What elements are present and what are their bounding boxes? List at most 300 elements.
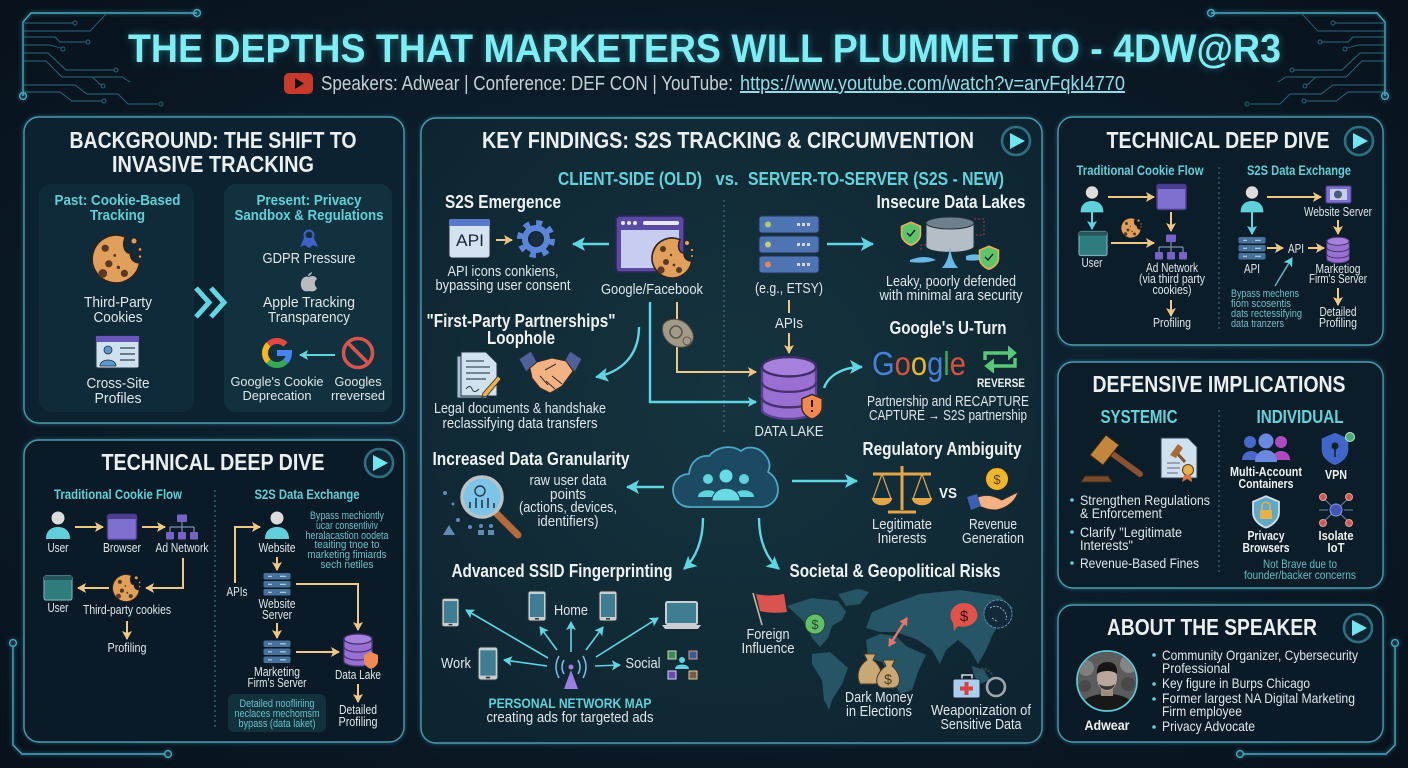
subtitle bbox=[284, 73, 1125, 95]
detailed profiling bbox=[1319, 304, 1357, 330]
icon: medical kit bbox=[953, 675, 980, 698]
icon: speech bubble bbox=[950, 603, 977, 631]
icon: handcuffs bbox=[975, 669, 1005, 696]
heading: Google's U-Turn bbox=[890, 318, 1006, 338]
device: phone (pink) bbox=[599, 591, 617, 621]
icon: api window: API bbox=[456, 231, 484, 250]
arrow bbox=[1308, 247, 1324, 249]
icon: iot hub bbox=[1319, 494, 1353, 526]
list: speaker bio: Firm employee bbox=[1162, 703, 1242, 719]
icon: user bbox=[1241, 186, 1263, 212]
icon: flag bbox=[753, 593, 787, 625]
icon: play bbox=[1344, 614, 1372, 642]
label: DATA LAKE bbox=[754, 423, 824, 440]
heading: ABOUT THE SPEAKER bbox=[1107, 614, 1317, 640]
icon: cookie bbox=[1121, 218, 1142, 238]
description: API icons conkiens, bbox=[448, 263, 558, 280]
label: weaponization: Sensitive Data bbox=[940, 716, 1022, 733]
list: systemic: & Enforcement bbox=[1080, 505, 1162, 521]
icon: browser bbox=[1157, 184, 1186, 210]
user node: User bbox=[48, 540, 69, 555]
comparison heading: CLIENT-SIDE (OLD) bbox=[558, 169, 702, 189]
heading: TECHNICAL DEEP DIVE bbox=[102, 449, 324, 475]
icon: gdpr lock bbox=[300, 230, 318, 248]
heading bbox=[426, 311, 616, 348]
website node: Website bbox=[258, 540, 296, 555]
label: (e.g., ETSY) bbox=[755, 280, 823, 297]
description: Partnership and RECAPTURE bbox=[867, 393, 1029, 410]
arrow bbox=[1267, 247, 1283, 249]
website server node: Website bbox=[258, 596, 296, 611]
data lake node: Data Lake bbox=[335, 667, 381, 682]
heading: Increased Data Granularity bbox=[432, 449, 630, 469]
label: foreign influence: Foreign bbox=[746, 626, 790, 643]
marketing firm's server node: Marketiog bbox=[1316, 261, 1360, 276]
annotation: heralacastion oodeta bbox=[306, 530, 389, 542]
arrow bbox=[1267, 196, 1321, 198]
heading: Societal & Geopolitical Risks bbox=[790, 561, 1000, 581]
description: identifiers) bbox=[538, 513, 598, 530]
subheading: s2s data exchange: S2S Data Exchange bbox=[254, 486, 360, 502]
icon: money bags: $ bbox=[884, 671, 892, 687]
diagram: traditional cookie flow bbox=[44, 512, 209, 655]
icon: scales bbox=[873, 466, 931, 512]
description: raw user data bbox=[530, 472, 607, 489]
label: weaponization bbox=[931, 702, 1032, 733]
comparison heading: vs. bbox=[716, 169, 738, 189]
section: increased data granularity bbox=[432, 449, 630, 535]
ad network node bbox=[1139, 234, 1205, 297]
arrow bbox=[296, 584, 358, 630]
icon: play bbox=[1345, 127, 1373, 155]
heading: Insecure Data Lakes bbox=[876, 192, 1026, 212]
arrow bbox=[496, 239, 512, 241]
speaker name: Adwear bbox=[1084, 717, 1130, 733]
ad network node: Ad Network bbox=[1146, 260, 1198, 275]
annotation: ucar consentiviv bbox=[316, 520, 378, 532]
arrow bbox=[146, 558, 183, 588]
label: reverse: REVERSE bbox=[977, 376, 1025, 390]
label: cross-site profiles bbox=[86, 375, 150, 407]
icon: user bbox=[1081, 186, 1103, 212]
browser node bbox=[103, 514, 142, 555]
icon: social network bbox=[668, 651, 697, 679]
icon: stone bbox=[663, 319, 693, 347]
annotation: sech netiles bbox=[320, 559, 374, 571]
icon: green coin: $ bbox=[811, 617, 819, 632]
website server node bbox=[258, 573, 296, 622]
icon: vpn shield bbox=[1322, 432, 1354, 465]
arrow bbox=[1170, 212, 1172, 231]
label: gdpr pressure: GDPR Pressure bbox=[262, 250, 356, 267]
label: weaponization: Weaponization of bbox=[931, 702, 1032, 719]
icon: youtube bbox=[284, 73, 313, 94]
profiling label: Profiling bbox=[1153, 315, 1191, 330]
arrow: curved to partnerships bbox=[596, 327, 639, 377]
annotation: Bypass mechens bbox=[1231, 288, 1299, 300]
arrow bbox=[1111, 242, 1154, 244]
description bbox=[867, 393, 1029, 424]
arrow: curved to societal bbox=[759, 518, 779, 569]
heading: background: INVASIVE TRACKING bbox=[112, 151, 314, 177]
arrow bbox=[827, 243, 873, 245]
heading: KEY FINDINGS: S2S TRACKING & CIRCUMVENTION bbox=[482, 127, 974, 153]
arrow bbox=[142, 526, 165, 528]
arrow bbox=[75, 526, 103, 528]
label: dark money in elections: Dark Money bbox=[845, 689, 913, 706]
label: apple tracking transparency bbox=[263, 294, 355, 326]
device: phone bbox=[442, 598, 459, 627]
annotation: dats rectessifying bbox=[1231, 308, 1302, 320]
user window node bbox=[44, 576, 72, 615]
arrow: annotation bbox=[1275, 258, 1292, 286]
detailed profiling: Profiling bbox=[338, 714, 378, 729]
past heading: Tracking bbox=[90, 207, 145, 224]
icon: cloud with users bbox=[673, 447, 778, 507]
label: foreign influence bbox=[742, 626, 794, 657]
arrow bbox=[573, 243, 609, 245]
icon: play bbox=[365, 449, 393, 477]
heading: "First-Party Partnerships" bbox=[426, 311, 616, 331]
description: Leaky, poorly defended bbox=[886, 273, 1016, 290]
arrow: to data lake (cyan) bbox=[650, 302, 756, 402]
description: with minimal ara security bbox=[879, 287, 1023, 304]
marketing firm's server node bbox=[1309, 237, 1368, 286]
heading: Loophole bbox=[487, 328, 555, 348]
icon: dark globe bbox=[984, 600, 1012, 628]
description: bypassing user consent bbox=[436, 277, 571, 294]
api server node: API bbox=[1244, 261, 1260, 276]
label: third-party cookies: Cookies bbox=[94, 309, 142, 326]
ad network node: cookies) bbox=[1152, 282, 1192, 297]
icon: handshake bbox=[519, 351, 582, 393]
device: work phone bbox=[478, 647, 498, 680]
panel: defensive implications bbox=[1058, 362, 1383, 588]
caption: creating ads for targeted ads bbox=[486, 709, 654, 726]
arrow: apis: APIs bbox=[775, 315, 803, 332]
list: speaker bio bbox=[1152, 647, 1358, 734]
heading: Regulatory Ambiguity bbox=[862, 439, 1022, 459]
cookie node: Third-party cookies bbox=[83, 602, 171, 617]
icon: coin and hand bbox=[967, 468, 1018, 510]
api server node bbox=[1238, 237, 1266, 276]
label: third-party cookies: Third-Party bbox=[84, 294, 152, 311]
description: CAPTURE → S2S partnership bbox=[869, 407, 1027, 424]
section: s2s emergence bbox=[436, 192, 571, 294]
label: cross-site profiles: Profiles bbox=[94, 390, 142, 407]
annotation: Bypass mechiontly bbox=[310, 510, 384, 522]
label: personal network map: PERSONAL NETWORK MAP bbox=[488, 695, 652, 711]
list: speaker bio: Key figure in Burps Chicago bbox=[1162, 675, 1310, 691]
label: revenue generation bbox=[962, 516, 1024, 547]
icon: leaky tank bbox=[902, 217, 998, 269]
subheading: traditional cookie flow: Traditional Cookie Flow bbox=[54, 486, 182, 502]
diagram: s2s data exchange bbox=[226, 510, 389, 732]
arrow bbox=[78, 587, 109, 589]
arrow bbox=[357, 684, 359, 702]
label: third-party cookies bbox=[84, 294, 152, 326]
present heading: Sandbox & Regulations bbox=[234, 207, 384, 224]
diagram: traditional cookie flow bbox=[1079, 184, 1205, 330]
item: vpn bbox=[1322, 432, 1354, 482]
user window node: User bbox=[48, 600, 69, 615]
icon: prohibited bbox=[344, 338, 372, 368]
icon: people bbox=[1242, 434, 1290, 462]
icon: certificate document bbox=[1161, 438, 1197, 482]
description: reclassifying data transfers bbox=[442, 415, 598, 432]
section: first-party partnerships loophole bbox=[426, 311, 616, 432]
present heading: Present: Privacy bbox=[256, 192, 362, 209]
data lake node bbox=[754, 357, 824, 440]
label: dark money in elections: in Elections bbox=[846, 703, 912, 720]
website node bbox=[258, 512, 296, 555]
speaker portrait bbox=[1077, 651, 1138, 712]
icon: apple bbox=[301, 272, 317, 291]
subheading: traditional cookie flow: Traditional Cookie Flow bbox=[1076, 162, 1204, 178]
heading: TECHNICAL DEEP DIVE bbox=[1106, 127, 1330, 153]
icon: legal document bbox=[457, 352, 501, 398]
arrow bbox=[792, 480, 857, 482]
description bbox=[436, 263, 571, 294]
label: google's cookie deprecation: Deprecation bbox=[242, 388, 312, 403]
item: isolate iot: Isolate bbox=[1318, 528, 1354, 543]
list: systemic bbox=[1070, 492, 1210, 571]
heading: DEFENSIVE IMPLICATIONS bbox=[1092, 371, 1346, 397]
item: multi-account containers bbox=[1230, 434, 1303, 491]
panel: technical deep dive (left) bbox=[24, 440, 404, 742]
marketing firm's server node: Marketing bbox=[254, 664, 300, 679]
label: Google/Facebook bbox=[601, 281, 703, 298]
item: privacy browsers: Privacy bbox=[1248, 528, 1285, 543]
ad network node: Ad Network bbox=[156, 540, 209, 555]
annotation: teaiting tnoe to bbox=[314, 539, 380, 551]
annotation: fiom scosentis bbox=[1231, 298, 1291, 310]
list: speaker bio: Privacy Advocate bbox=[1162, 718, 1255, 734]
label: home: Home bbox=[554, 602, 588, 619]
section: advanced ssid fingerprinting bbox=[441, 561, 701, 726]
arrow: curved to google bbox=[824, 367, 862, 388]
device: laptop bbox=[662, 602, 701, 629]
note bbox=[1244, 557, 1356, 582]
past heading bbox=[54, 192, 180, 224]
cookie node bbox=[83, 574, 171, 617]
section: regulatory ambiguity bbox=[862, 439, 1024, 547]
list: speaker bio: Former largest NA Digital Marketing bbox=[1162, 690, 1355, 706]
callout: bypass (data laket) bbox=[238, 718, 316, 730]
subheading: systemic: SYSTEMIC bbox=[1100, 407, 1178, 427]
user window bbox=[1079, 232, 1107, 270]
icon: magnifier bbox=[443, 477, 518, 535]
detailed profiling: Profiling bbox=[1319, 315, 1357, 330]
item: multi-account containers: Multi-Account bbox=[1230, 464, 1303, 479]
annotation: data tranzers bbox=[1231, 318, 1284, 330]
item: privacy browsers bbox=[1242, 496, 1290, 555]
arrow bbox=[1251, 212, 1253, 234]
google wordmark: Google bbox=[872, 345, 966, 382]
label: legitimate interests: Inierests bbox=[878, 530, 926, 547]
diagram: s2s data exchange bbox=[1231, 186, 1373, 330]
panel: background bbox=[24, 117, 404, 423]
label: apple tracking transparency: Apple Tracking bbox=[263, 294, 355, 311]
label: work: Work bbox=[441, 655, 471, 672]
arrow: curved to ssid bbox=[684, 518, 703, 569]
icon: google g bbox=[265, 341, 289, 365]
comparison heading: SERVER-TO-SERVER (S2S - NEW) bbox=[748, 169, 1004, 189]
website server node: Website Server bbox=[1304, 204, 1373, 219]
sub-panel: past bbox=[39, 184, 194, 412]
detailed profiling bbox=[338, 702, 378, 729]
user window: User bbox=[1082, 255, 1103, 270]
world map bbox=[787, 589, 1013, 710]
callout: Detailed noofliriing bbox=[240, 698, 314, 710]
icon: lock shield bbox=[1253, 496, 1279, 528]
marketing firm's server node: Firm's Server bbox=[1309, 271, 1368, 286]
description: Legal documents & handshake bbox=[434, 400, 606, 417]
heading: S2S Emergence bbox=[445, 192, 561, 212]
icon: profile card bbox=[96, 336, 139, 368]
label: social: Social bbox=[626, 655, 660, 672]
item: isolate iot bbox=[1318, 494, 1354, 555]
heading: background bbox=[70, 127, 356, 177]
callout bbox=[228, 694, 326, 732]
present heading bbox=[234, 192, 384, 224]
annotation bbox=[1231, 288, 1302, 330]
callout: neclaces mechomsm bbox=[234, 708, 320, 720]
panel: key findings bbox=[421, 118, 1042, 743]
arrow bbox=[126, 621, 128, 639]
user node bbox=[46, 512, 70, 555]
description bbox=[519, 472, 617, 530]
list: systemic: Interests" bbox=[1080, 537, 1133, 553]
arrow bbox=[627, 486, 664, 488]
label: revenue generation: Revenue bbox=[969, 516, 1017, 533]
arrow bbox=[1337, 220, 1339, 234]
device: phone bbox=[528, 591, 546, 621]
arrow bbox=[1108, 196, 1154, 198]
arrow: to data lake (tan) bbox=[677, 302, 756, 372]
comparison heading bbox=[558, 169, 1004, 189]
icon: wifi antenna bbox=[556, 656, 586, 689]
subheading: s2s data exchange: S2S Data Exchange bbox=[1247, 162, 1351, 178]
icon: play bbox=[1002, 127, 1030, 155]
server node bbox=[755, 216, 823, 297]
arrow bbox=[276, 557, 278, 570]
apis label: APIs bbox=[226, 584, 248, 599]
sub-panel: present bbox=[224, 184, 392, 412]
list: speaker bio: Community Organizer, Cybersecurity bbox=[1162, 647, 1358, 663]
profiling label: Profiling bbox=[108, 640, 146, 655]
heading: background: BACKGROUND: THE SHIFT TO bbox=[70, 127, 356, 153]
icon: gear bbox=[520, 223, 552, 255]
label: legitimate interests: Legitimate bbox=[872, 516, 932, 533]
icon: database bbox=[762, 357, 816, 419]
google/facebook node bbox=[601, 216, 703, 298]
heading: Advanced SSID Fingerprinting bbox=[452, 561, 672, 581]
label: google's cookie deprecation: Google's Cookie bbox=[230, 374, 324, 389]
subheading: individual: INDIVIDUAL bbox=[1256, 407, 1344, 427]
label: google's cookie deprecation bbox=[230, 374, 324, 403]
description: (actions, devices, bbox=[519, 499, 617, 516]
section: societal and geopolitical risks bbox=[742, 561, 1032, 733]
annotation: marketing fimiards bbox=[308, 549, 387, 561]
website server node bbox=[1304, 186, 1373, 219]
description: points bbox=[550, 486, 586, 503]
item: vpn: VPN bbox=[1325, 467, 1347, 482]
description bbox=[434, 400, 606, 432]
label: vs: VS bbox=[939, 485, 957, 502]
arrows: antenna to devices bbox=[466, 610, 658, 666]
panel: technical deep dive (right) bbox=[1058, 117, 1383, 345]
label: api: API bbox=[1288, 241, 1304, 256]
arrow: past to present bbox=[196, 288, 224, 317]
list: systemic: Strengthen Regulations bbox=[1080, 492, 1210, 508]
description bbox=[879, 273, 1023, 304]
detailed profiling: Detailed bbox=[1320, 304, 1356, 319]
arrow bbox=[296, 651, 339, 653]
arrow: reversal bbox=[300, 354, 335, 356]
note: Not Brave due to bbox=[1263, 557, 1337, 571]
ad network node bbox=[156, 514, 209, 555]
arrow: apis bbox=[775, 300, 803, 353]
marketing firm's server node bbox=[248, 640, 307, 690]
list: systemic: Revenue-Based Fines bbox=[1080, 555, 1199, 571]
title: THE DEPTHS THAT MARKETERS WILL PLUMMET TO - 4DW@R3 bbox=[128, 27, 1281, 71]
arrow bbox=[1337, 288, 1339, 305]
icon: green coin bbox=[805, 614, 825, 634]
past heading: Past: Cookie-Based bbox=[54, 192, 180, 209]
icon: cookie bbox=[92, 235, 142, 283]
label: googles reversed: Googles bbox=[334, 374, 382, 389]
label: cross-site profiles: Cross-Site bbox=[86, 375, 150, 392]
item: multi-account containers: Containers bbox=[1238, 476, 1294, 491]
label: legitimate interests bbox=[872, 516, 932, 547]
panel: about the speaker bbox=[1058, 605, 1383, 742]
section: insecure data lakes bbox=[876, 192, 1026, 304]
youtube link: https://www.youtube.com/watch?v=arvFqkI4770 bbox=[740, 73, 1125, 95]
label: apple tracking transparency: Transparency bbox=[268, 309, 350, 326]
list: speaker bio: Professional bbox=[1162, 660, 1230, 676]
icon: server rack bbox=[759, 216, 819, 273]
arrow: two-way bbox=[889, 618, 907, 646]
section: google's u-turn bbox=[867, 318, 1029, 424]
label: googles reversed bbox=[331, 374, 385, 403]
icon: money bags bbox=[858, 654, 900, 688]
browser node: Browser bbox=[103, 540, 142, 555]
label: revenue generation: Generation bbox=[962, 530, 1024, 547]
ad network node: (via third party bbox=[1139, 271, 1205, 286]
arrow bbox=[1170, 300, 1172, 316]
detailed profiling: Detailed bbox=[339, 702, 377, 717]
icon: browser with cookie bbox=[616, 216, 694, 278]
icon: reverse arrows bbox=[985, 346, 1016, 373]
arrow bbox=[276, 623, 278, 638]
website server node: Server bbox=[262, 607, 293, 622]
item: privacy browsers: Browsers bbox=[1242, 540, 1290, 555]
label: googles reversed: rreversed bbox=[331, 388, 385, 403]
list: systemic: Clarify "Legitimate bbox=[1080, 524, 1182, 540]
data lake node bbox=[335, 634, 381, 682]
label: foreign influence: Influence bbox=[742, 640, 794, 657]
icon: coin and hand: $ bbox=[993, 472, 1001, 487]
icon: speech bubble: $ bbox=[960, 608, 969, 625]
speakers and conference line: Speakers: Adwear | Conference: DEF CON | YouTube: bbox=[321, 73, 733, 95]
annotation bbox=[306, 510, 389, 571]
icon: gavel bbox=[1081, 435, 1140, 482]
icon: warning shield bbox=[802, 394, 822, 419]
arrow: apis bbox=[235, 527, 260, 583]
label: dark money in elections bbox=[845, 689, 913, 720]
arrow bbox=[1091, 212, 1093, 229]
